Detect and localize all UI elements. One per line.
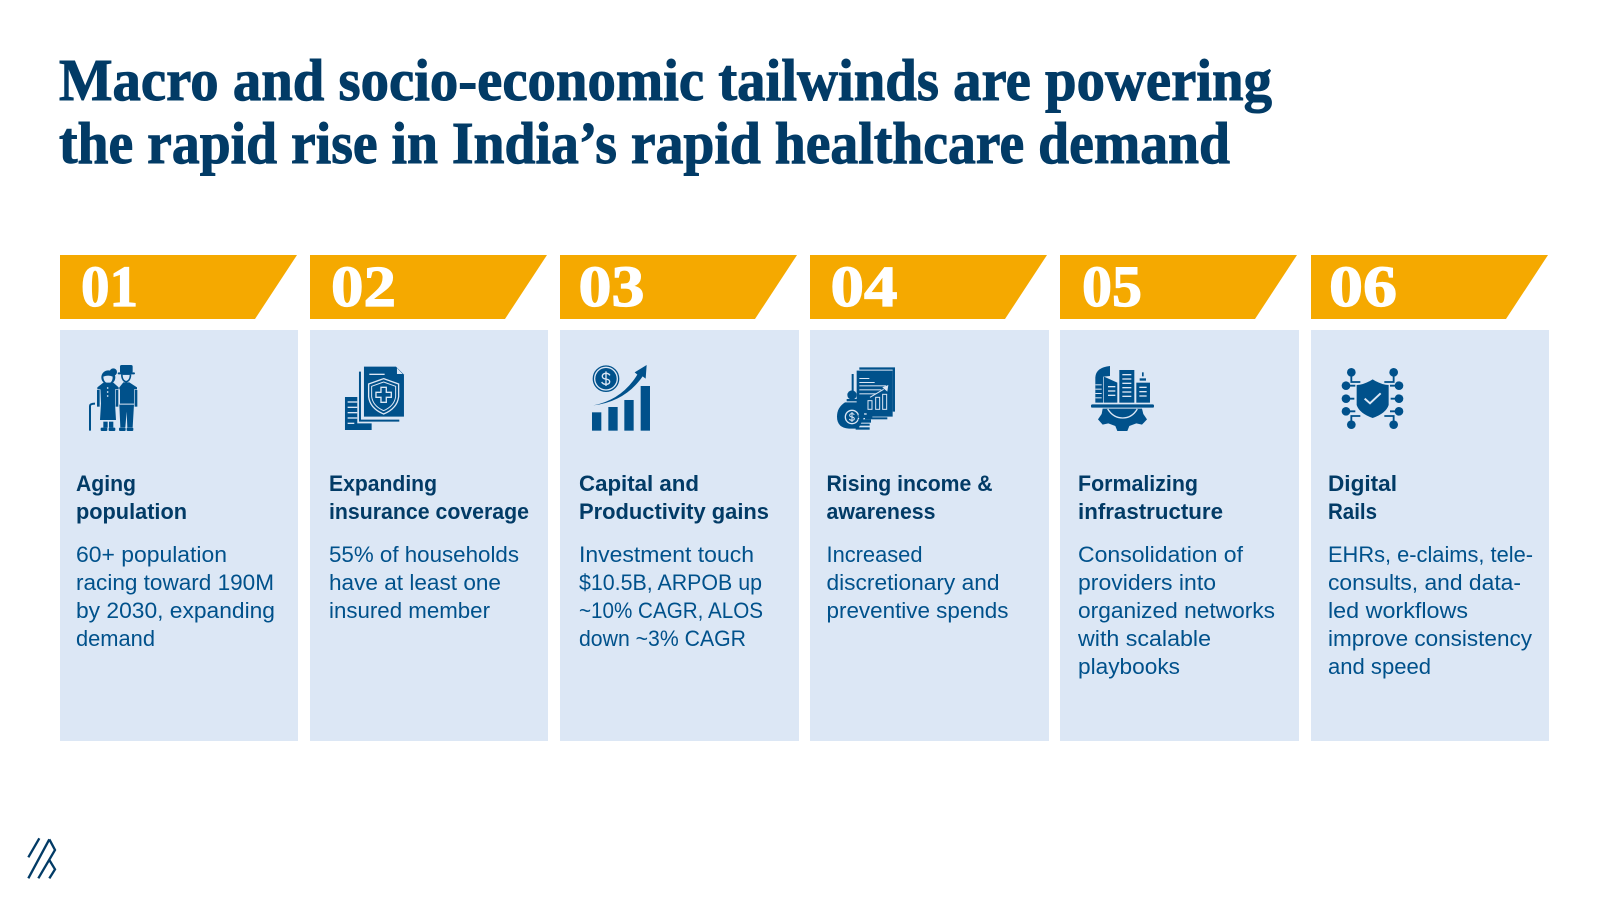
body text 04 [826,542,1008,623]
body text 05: Consolidation of [1078,542,1244,567]
body text 06: improve consistency [1328,626,1532,651]
body text 02: have at least one [329,570,501,595]
panel: 05 formalizing infrastructure [1060,254,1299,741]
icon: elderly couple [90,365,137,431]
body text 03: Investment touch [579,542,754,567]
body text 02: insured member [329,598,490,623]
heading 02: insurance coverage [329,499,529,524]
heading 02: Expanding [329,471,437,496]
heading 04: Rising income & [826,471,993,496]
panel: 04 rising income and awareness [810,254,1049,741]
body text 06: consults, and data- [1328,570,1521,595]
panel: 06 digital rails [1311,254,1549,741]
heading 01: population [76,499,187,524]
body text 05 [1077,542,1275,679]
body text 02 [329,542,519,623]
number banner 03 [560,254,797,319]
body text 04: discretionary and [826,570,1000,595]
number banner 04 [810,254,1047,319]
card 02 background [310,330,548,741]
body text 06 [1328,542,1533,679]
body text 01 [76,542,275,651]
icon: growth chart with coin [592,365,650,431]
heading 02 [329,471,529,524]
body text 03 [579,542,763,651]
panel: 02 expanding insurance coverage [310,254,548,741]
number banner 01: 01 [81,254,138,319]
number banner 06: 06 [1329,254,1397,319]
card 05 background [1060,330,1299,741]
number banner 06 [1311,254,1548,319]
card 04 background [810,330,1049,741]
number banner 05: 05 [1082,254,1142,319]
number banner 02: 02 [331,254,396,319]
body text 01: demand [76,626,155,651]
heading 05: infrastructure [1078,499,1223,524]
heading 06: Digital [1328,471,1397,496]
body text 04: preventive spends [826,598,1008,623]
panel: 01 aging population [60,254,298,741]
body text 03: ~10% CAGR, ALOS [579,598,763,623]
body text 01: by 2030, expanding [76,598,275,623]
body text 03: $10.5B, ARPOB up [579,570,762,595]
number banner 05 [1060,254,1297,319]
heading 03: Capital and [579,471,699,496]
body text 06: led workflows [1328,598,1468,623]
title [59,47,1272,176]
body text 01: 60+ population [76,542,227,567]
heading 06 [1328,471,1397,524]
card 01 background [60,330,298,741]
heading 03: Productivity gains [579,499,769,524]
heading 01: Aging [76,471,136,496]
title: Macro and socio-economic tailwinds are powering [59,47,1272,113]
heading 04: awareness [826,499,936,524]
icon: insurance document with shield [345,367,404,430]
card 03 background [560,330,799,741]
heading 05: Formalizing [1078,471,1198,496]
icon: buildings on gear [1091,366,1154,431]
body text 03: down ~3% CAGR [579,626,746,651]
body text 06: EHRs, e-claims, tele- [1328,542,1533,567]
number banner 03: 03 [578,254,644,319]
body text 01: racing toward 190M [76,570,274,595]
heading 01 [76,471,187,524]
icon: digital shield circuit [1342,368,1403,429]
number banner 04: 04 [830,254,898,319]
panel: 03 capital and productivity gains [560,254,799,741]
body text 05: playbooks [1078,654,1180,679]
body text 05: providers into [1078,570,1216,595]
number banner 01 [60,254,297,319]
title: the rapid rise in India’s rapid healthcare demand [59,110,1230,176]
logo mark [28,838,55,878]
body text 05: organized networks [1078,598,1275,623]
heading 04 [826,471,993,524]
body text 05: with scalable [1077,626,1211,651]
card 06 background [1311,330,1549,741]
body text 04: Increased [826,542,922,567]
heading 05 [1078,471,1223,524]
heading 06: Rails [1328,499,1377,524]
icon: money bag and report [837,367,895,430]
body text 06: and speed [1328,654,1431,679]
heading 03 [579,471,769,524]
body text 02: 55% of households [329,542,519,567]
number banner 02 [310,254,547,319]
